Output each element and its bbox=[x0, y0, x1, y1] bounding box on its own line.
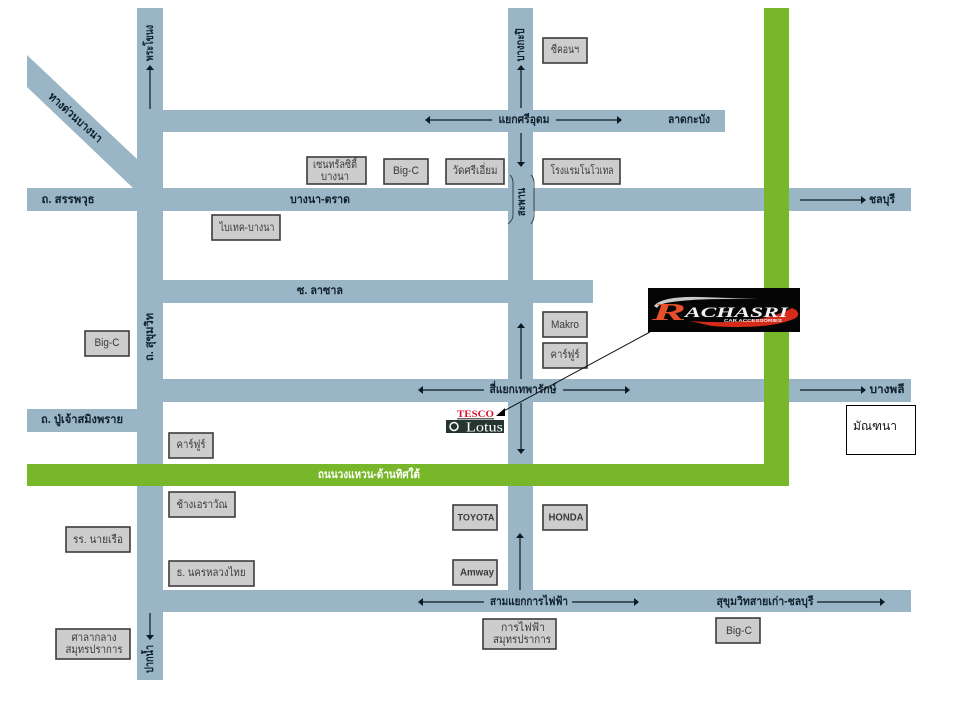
landmark: Central City Bangna: เซนทรัลซิตี้ bbox=[313, 156, 358, 171]
landmark: Big-C Old Sukhumvit bbox=[716, 618, 760, 643]
bridge brackets bbox=[508, 175, 534, 224]
road labels: ลาดกะบัง bbox=[668, 113, 710, 126]
road labels: ทางด่วนบางนา bbox=[46, 90, 105, 145]
location pointer arrow bbox=[496, 332, 650, 416]
landmark: Novotel: โรงแรมโนโวเทล bbox=[550, 163, 614, 177]
landmark: Toyota: TOYOTA bbox=[458, 512, 495, 524]
landmark: Amway: Amway bbox=[460, 568, 494, 578]
landmark: Amway bbox=[453, 560, 497, 585]
landmark: Carrefour Theparak bbox=[543, 343, 587, 368]
direction arrows bbox=[146, 65, 885, 640]
landmark: Central City Bangna bbox=[307, 156, 366, 184]
landmark: Samut Prakan City Hall: สมุทรปราการ bbox=[66, 644, 123, 656]
logo: Rachasri: ACHASRI bbox=[683, 305, 790, 321]
logo: Rachasri bbox=[648, 288, 800, 332]
landmark: Siam City Bank: ธ. นครหลวงไทย bbox=[176, 566, 246, 579]
logo: Tesco Lotus: Lotus bbox=[466, 420, 503, 436]
road labels: ซ. ลาซาล bbox=[297, 285, 343, 297]
road labels: สุขุมวิทสายเก่า-ชลบุรี bbox=[716, 595, 814, 609]
landmark: Naval Academy bbox=[66, 527, 130, 552]
landmark: Erawan Museum bbox=[169, 492, 235, 517]
landmark: Seacon: ซีคอนฯ bbox=[551, 43, 579, 56]
logo: Tesco Lotus bbox=[446, 410, 504, 436]
label box: Monthana: มัณฑนา bbox=[853, 419, 897, 433]
landmark: Wat Sri Iam bbox=[446, 159, 504, 184]
green ring road bbox=[27, 8, 789, 486]
road labels: ถ. สุขุมวิท bbox=[143, 313, 157, 361]
road labels: พระโขนง bbox=[141, 25, 156, 61]
road labels: ปากน้ำ bbox=[140, 645, 156, 673]
landmark: Carrefour Sukhumvit: คาร์ฟูร์ bbox=[176, 438, 206, 451]
road labels: แยกศรีอุดม bbox=[498, 113, 550, 127]
landmark: Seacon bbox=[543, 38, 587, 63]
logo: Rachasri: R bbox=[650, 300, 686, 326]
landmark: Carrefour Theparak: คาร์ฟูร์ bbox=[550, 348, 580, 361]
road labels: บางกะปิ bbox=[514, 28, 527, 62]
road labels: บางนา-ตราด bbox=[290, 194, 350, 206]
landmark: Electricity Authority: การไฟฟ้า bbox=[501, 621, 545, 634]
road labels: ชลบุรี bbox=[869, 193, 896, 207]
landmark: Big-C Bangna bbox=[384, 159, 428, 184]
road labels: สี่แยกเทพารักษ์ bbox=[490, 380, 557, 396]
landmark: Big-C Sukhumvit: Big-C bbox=[94, 337, 120, 349]
landmark: BITEC bbox=[212, 215, 280, 240]
landmark: Toyota bbox=[453, 505, 497, 530]
landmark: Makro: Makro bbox=[551, 319, 579, 331]
road labels: บางพลี bbox=[870, 383, 904, 396]
landmark: Makro bbox=[543, 312, 587, 337]
landmark: Erawan Museum: ช้างเอราวัณ bbox=[176, 499, 228, 511]
landmark: Big-C Bangna: Big-C bbox=[393, 165, 419, 177]
landmark: Carrefour Sukhumvit bbox=[169, 433, 213, 458]
landmark: Big-C Sukhumvit bbox=[85, 331, 129, 356]
landmark: Big-C Old Sukhumvit: Big-C bbox=[726, 625, 752, 637]
landmark: Electricity Authority bbox=[483, 619, 556, 649]
road labels: สามแยกการไฟฟ้า bbox=[490, 594, 568, 608]
road labels: ถ. สรรพวุธ bbox=[42, 194, 94, 207]
landmark: Central City Bangna: บางนา bbox=[321, 171, 349, 183]
road labels: ถนนวงแหวน-ด้านทิศใต้ bbox=[318, 467, 420, 481]
landmark: Novotel bbox=[543, 159, 620, 184]
logo: Rachasri: CAR ACCESSORIES bbox=[724, 318, 782, 323]
landmark: Honda bbox=[543, 505, 587, 530]
landmark: Siam City Bank bbox=[169, 561, 254, 586]
logo: Tesco Lotus: TESCO bbox=[457, 410, 494, 420]
landmark: Naval Academy: รร. นายเรือ bbox=[73, 533, 123, 546]
landmark: Samut Prakan City Hall: ศาลากลาง bbox=[72, 632, 116, 644]
landmark: Wat Sri Iam: วัดศรีเอี่ยม bbox=[452, 162, 498, 177]
landmark: Honda: HONDA bbox=[548, 512, 584, 524]
label box: Monthana bbox=[846, 406, 916, 454]
landmark: Electricity Authority: สมุทรปราการ bbox=[493, 634, 551, 646]
landmark: BITEC: ไบเทค-บางนา bbox=[219, 221, 274, 234]
road labels: สะพาน bbox=[516, 188, 528, 216]
landmark: Samut Prakan City Hall bbox=[56, 629, 130, 659]
road labels: ถ. ปู่เจ้าสมิงพราย bbox=[41, 413, 123, 427]
